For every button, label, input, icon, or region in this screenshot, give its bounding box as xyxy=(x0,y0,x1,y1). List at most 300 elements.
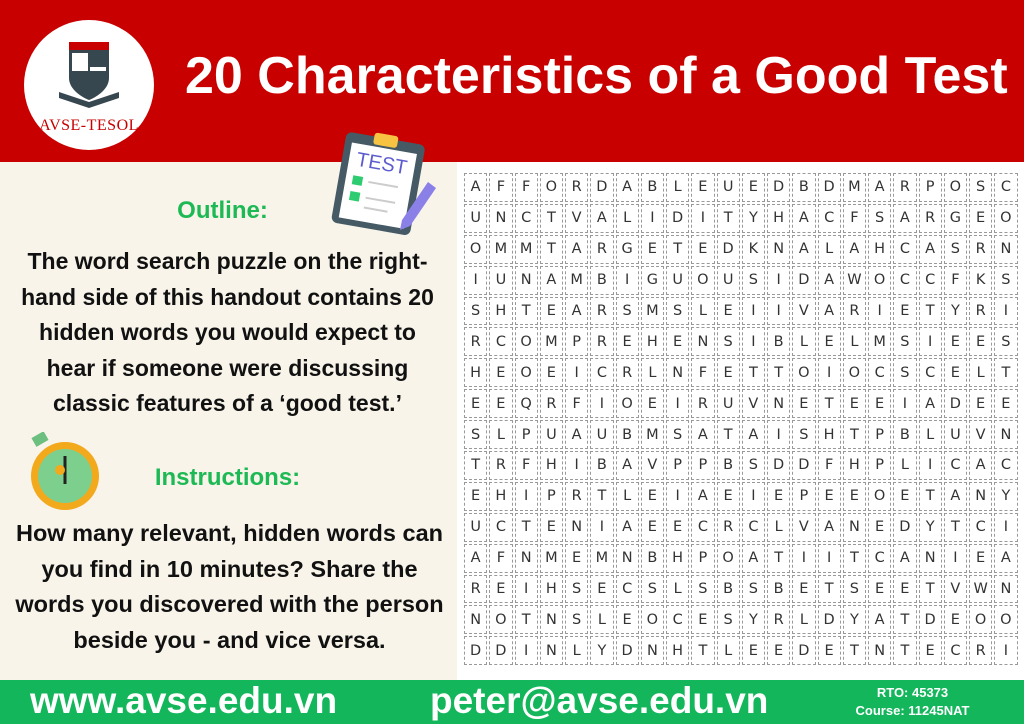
word search grid: F xyxy=(850,210,859,226)
word search grid: F xyxy=(497,550,505,566)
word search grid: W xyxy=(973,581,988,597)
word search grid: T xyxy=(926,303,935,319)
word search grid: B xyxy=(597,272,607,288)
word search grid: O xyxy=(697,272,709,288)
word search grid: E xyxy=(698,241,707,257)
word search grid: C xyxy=(875,550,885,566)
word search grid: V xyxy=(976,427,986,443)
word search grid: O xyxy=(647,612,658,628)
word search grid: M xyxy=(596,550,608,566)
word search grid: T xyxy=(900,612,909,628)
word search grid: P xyxy=(875,427,884,443)
word search grid: A xyxy=(622,457,632,473)
word search grid: A xyxy=(572,241,582,257)
word search grid: E xyxy=(496,365,505,381)
word search grid: S xyxy=(724,334,733,350)
word search grid: E xyxy=(774,643,783,659)
word search grid: E xyxy=(698,179,707,195)
word search grid: U xyxy=(723,179,733,195)
word search grid: E xyxy=(799,581,808,597)
word search grid: E xyxy=(976,210,985,226)
word search grid: R xyxy=(723,519,733,535)
word search grid: S xyxy=(1001,272,1010,288)
word search grid: E xyxy=(875,396,884,412)
word search grid: I xyxy=(877,303,882,319)
word search grid: N xyxy=(495,210,506,226)
word search grid: I xyxy=(751,303,756,319)
word search grid: D xyxy=(596,179,607,195)
word search grid: V xyxy=(572,210,582,226)
word search grid: D xyxy=(773,457,784,473)
word search grid: A xyxy=(976,457,986,473)
word search grid: E xyxy=(648,519,657,535)
word search grid: T xyxy=(774,365,783,381)
word search grid: C xyxy=(673,612,683,628)
word search grid: T xyxy=(951,519,960,535)
word search grid: I xyxy=(1004,519,1008,535)
word search grid: U xyxy=(546,427,557,443)
word search grid: B xyxy=(774,581,784,597)
word search grid: I xyxy=(600,519,604,535)
word search grid: A xyxy=(546,272,556,288)
word search grid: G xyxy=(647,272,658,288)
word search grid: A xyxy=(698,488,708,504)
word search grid: B xyxy=(774,334,784,350)
word search grid: I xyxy=(827,550,831,566)
word search grid: L xyxy=(497,427,505,443)
word search grid: T xyxy=(749,365,758,381)
word search grid: A xyxy=(471,550,481,566)
word search grid: V xyxy=(647,457,657,473)
word search grid: D xyxy=(798,643,809,659)
word search grid: C xyxy=(824,210,834,226)
word search grid: C xyxy=(496,334,506,350)
word search grid: D xyxy=(622,643,633,659)
word search grid: N xyxy=(521,272,532,288)
word search grid: T xyxy=(522,303,531,319)
word search grid: S xyxy=(749,272,758,288)
icon: test clipboard xyxy=(332,132,436,235)
word search grid: E xyxy=(976,550,985,566)
word search grid: R xyxy=(900,179,910,195)
word search grid: L xyxy=(598,612,606,628)
word search grid: I xyxy=(650,210,655,226)
word search grid: A xyxy=(597,210,607,226)
word search grid: O xyxy=(798,365,810,381)
word search grid: M xyxy=(873,334,886,350)
word search grid: S xyxy=(471,303,480,319)
word search grid: C xyxy=(925,272,935,288)
word search grid: S xyxy=(951,241,960,257)
word search grid: A xyxy=(471,179,481,195)
left panel xyxy=(0,162,457,680)
word search grid: S xyxy=(749,457,758,473)
word search grid: L xyxy=(977,365,985,381)
word search grid: U xyxy=(470,210,481,226)
word search grid: T xyxy=(597,488,606,504)
word search grid: I xyxy=(701,210,705,226)
word search grid: V xyxy=(799,303,809,319)
word search grid: R xyxy=(546,396,556,412)
word search grid: E xyxy=(623,612,632,628)
word search grid: E xyxy=(850,396,859,412)
word search grid: N xyxy=(1000,581,1011,597)
email: peter@avse.edu.vn xyxy=(430,680,768,721)
instructions text: beside you - and vice versa. xyxy=(73,626,386,652)
word search grid: L xyxy=(699,303,707,319)
word search grid: O xyxy=(849,365,860,381)
word search grid: N xyxy=(1000,427,1011,443)
word search grid: U xyxy=(723,272,733,288)
word search grid: E xyxy=(471,396,480,412)
word search grid: E xyxy=(951,365,960,381)
word search grid: R xyxy=(774,612,784,628)
icon: test clipboard: TEST xyxy=(355,149,409,179)
word search grid: E xyxy=(496,581,505,597)
word search grid: I xyxy=(524,643,528,659)
word search grid: H xyxy=(874,241,885,257)
word search grid: E xyxy=(900,581,909,597)
word search grid: H xyxy=(849,457,860,473)
word search grid: I xyxy=(574,457,579,473)
word search grid: E xyxy=(774,488,783,504)
word search grid: M xyxy=(570,272,583,288)
word search grid: I xyxy=(928,457,932,473)
word search grid: K xyxy=(976,272,985,288)
word search grid: E xyxy=(597,581,606,597)
word search grid: N xyxy=(672,365,683,381)
word search grid: M xyxy=(545,550,558,566)
word search grid: B xyxy=(723,581,733,597)
word search grid: C xyxy=(1001,179,1011,195)
word search grid: C xyxy=(698,519,708,535)
word search grid: E xyxy=(673,334,682,350)
word search grid: O xyxy=(520,365,532,381)
word search grid xyxy=(464,173,1018,665)
word search grid: A xyxy=(748,550,758,566)
word search grid: C xyxy=(597,365,607,381)
word search grid: T xyxy=(673,241,682,257)
word search grid: A xyxy=(925,396,935,412)
word search grid: V xyxy=(748,396,758,412)
word search grid: C xyxy=(925,365,935,381)
word search grid: A xyxy=(875,612,885,628)
word search grid: D xyxy=(798,272,809,288)
word search grid: I xyxy=(751,334,756,350)
word search grid: O xyxy=(520,334,532,350)
word search grid: I xyxy=(1004,643,1008,659)
icon: stopwatch xyxy=(31,432,99,510)
word search grid: O xyxy=(495,612,507,628)
word search grid: Y xyxy=(850,612,859,628)
word search grid: N xyxy=(874,643,885,659)
word search grid: B xyxy=(799,179,809,195)
word search grid: B xyxy=(723,457,733,473)
word search grid: A xyxy=(622,179,632,195)
rto info: RTO: 45373 xyxy=(877,685,948,700)
word search grid: C xyxy=(622,581,632,597)
word search grid: N xyxy=(773,396,784,412)
word search grid: H xyxy=(672,643,683,659)
word search grid: E xyxy=(547,519,556,535)
word search grid: C xyxy=(875,365,885,381)
word search grid: I xyxy=(953,550,958,566)
word search grid: E xyxy=(1001,396,1010,412)
word search grid: D xyxy=(672,210,683,226)
word search grid: R xyxy=(597,241,607,257)
word search grid: I xyxy=(827,365,831,381)
outline text: classic features of a ‘good test.’ xyxy=(53,390,402,416)
word search grid: Y xyxy=(951,303,960,319)
word search grid: I xyxy=(751,488,756,504)
word search grid: U xyxy=(496,272,506,288)
word search grid: A xyxy=(1001,550,1011,566)
instructions text: How many relevant, hidden words can xyxy=(16,520,443,546)
word search grid: L xyxy=(775,519,783,535)
title: 20 Characteristics of a Good Test xyxy=(185,47,1008,105)
word search grid: M xyxy=(545,334,558,350)
word search grid: E xyxy=(547,365,556,381)
outline text: hidden words you would expect to xyxy=(39,319,416,345)
word search grid: S xyxy=(976,179,985,195)
word search grid: M xyxy=(646,427,659,443)
outline text: hear if someone were discussing xyxy=(47,354,408,380)
word search grid: L xyxy=(724,643,732,659)
word search grid: O xyxy=(621,396,633,412)
word search grid: E xyxy=(825,334,834,350)
word search grid: S xyxy=(1001,334,1010,350)
word search grid: F xyxy=(951,272,960,288)
word search grid: O xyxy=(470,241,481,257)
outline text xyxy=(21,248,434,416)
word search grid: R xyxy=(698,396,708,412)
word search grid: N xyxy=(571,519,582,535)
word search grid: A xyxy=(900,550,910,566)
word search grid: S xyxy=(572,612,581,628)
word search grid: S xyxy=(875,210,884,226)
website: www.avse.edu.vn xyxy=(30,680,337,721)
word search grid: Y xyxy=(1001,488,1010,504)
word search grid: C xyxy=(900,272,910,288)
word search grid: H xyxy=(546,581,557,597)
footer xyxy=(0,680,1024,724)
word search grid: D xyxy=(899,519,910,535)
heading: instructions: Instructions: xyxy=(155,464,300,491)
word search grid: F xyxy=(699,365,707,381)
word search grid: A xyxy=(698,427,708,443)
word search grid: R xyxy=(597,303,607,319)
word search grid: I xyxy=(802,550,806,566)
word search grid: Y xyxy=(926,519,935,535)
word search grid: L xyxy=(573,643,581,659)
word search grid: A xyxy=(824,272,834,288)
word search grid: A xyxy=(875,179,885,195)
word search grid: R xyxy=(471,581,481,597)
word search grid: U xyxy=(470,519,481,535)
word search grid: T xyxy=(900,643,909,659)
word search grid: T xyxy=(774,550,783,566)
word search grid: L xyxy=(623,210,631,226)
instructions text: words you discovered with the person xyxy=(15,591,444,617)
word search grid: T xyxy=(926,581,935,597)
word search grid: E xyxy=(724,365,733,381)
word search grid: U xyxy=(950,427,961,443)
word search grid: A xyxy=(622,519,632,535)
word search grid: T xyxy=(724,427,733,443)
word search grid: A xyxy=(572,427,582,443)
word search grid: N xyxy=(697,334,708,350)
word search grid: E xyxy=(547,303,556,319)
word search grid: C xyxy=(950,643,960,659)
word search grid: H xyxy=(470,365,481,381)
word search grid: N xyxy=(470,612,481,628)
word search grid: R xyxy=(496,457,506,473)
word search grid: T xyxy=(850,643,859,659)
word search grid: O xyxy=(975,612,986,628)
word search grid: E xyxy=(698,612,707,628)
word search grid: A xyxy=(572,303,582,319)
word search grid: O xyxy=(1000,612,1012,628)
word search grid: H xyxy=(495,303,506,319)
word search grid: T xyxy=(825,581,834,597)
word search grid: N xyxy=(1000,241,1011,257)
word search grid: S xyxy=(648,581,657,597)
word search grid: R xyxy=(572,179,582,195)
rto info: Course: 11245NAT xyxy=(856,703,969,718)
word search grid: B xyxy=(647,550,657,566)
word search grid: S xyxy=(471,427,480,443)
word search grid: A xyxy=(925,241,935,257)
word search grid: R xyxy=(572,488,582,504)
word search grid: A xyxy=(950,488,960,504)
word search grid: T xyxy=(471,457,480,473)
word search grid: B xyxy=(647,179,657,195)
word search grid: I xyxy=(776,303,781,319)
word search grid: N xyxy=(849,519,860,535)
word search grid: S xyxy=(673,303,682,319)
word search grid: S xyxy=(623,303,632,319)
word search grid: D xyxy=(723,241,734,257)
word search grid: C xyxy=(521,210,531,226)
word search grid: P xyxy=(800,488,808,504)
word search grid: E xyxy=(471,488,480,504)
logo: AVSE-TESOL xyxy=(39,117,139,134)
word search grid: C xyxy=(900,241,910,257)
word search grid: R xyxy=(976,643,986,659)
word search grid: Q xyxy=(520,396,532,412)
word search grid: A xyxy=(824,303,834,319)
word search grid: N xyxy=(925,550,936,566)
word search grid: R xyxy=(976,241,986,257)
word search grid: H xyxy=(647,334,658,350)
word search grid: E xyxy=(976,334,985,350)
word search grid: T xyxy=(825,396,834,412)
word search grid: C xyxy=(748,519,758,535)
word search grid: I xyxy=(524,488,528,504)
word search grid: S xyxy=(673,427,682,443)
word search grid: I xyxy=(675,396,680,412)
word search grid: R xyxy=(849,303,859,319)
word search grid: E xyxy=(572,550,581,566)
word search grid: T xyxy=(547,241,556,257)
word search grid: I xyxy=(524,581,528,597)
word search grid: N xyxy=(546,612,557,628)
word search grid: E xyxy=(623,334,632,350)
word search grid: E xyxy=(875,581,884,597)
word search grid: L xyxy=(850,334,858,350)
word search grid: O xyxy=(1000,210,1012,226)
word search grid: N xyxy=(521,550,532,566)
word search grid: E xyxy=(749,643,758,659)
word search grid: E xyxy=(875,519,884,535)
word search grid: F xyxy=(497,179,505,195)
word search grid: D xyxy=(773,179,784,195)
word search grid: T xyxy=(850,550,859,566)
word search grid: S xyxy=(724,612,733,628)
word search grid: I xyxy=(1004,303,1008,319)
word search grid: H xyxy=(824,427,835,443)
word search grid: E xyxy=(724,303,733,319)
word search grid: H xyxy=(495,488,506,504)
word search grid: R xyxy=(597,334,607,350)
word search grid: A xyxy=(799,210,809,226)
word search grid: V xyxy=(950,581,960,597)
word search grid: L xyxy=(674,179,682,195)
word search grid: L xyxy=(623,488,631,504)
word search grid: O xyxy=(874,272,885,288)
heading: outline: Outline: xyxy=(177,197,268,224)
word search grid: S xyxy=(900,334,909,350)
word search grid: I xyxy=(600,396,604,412)
word search grid: Y xyxy=(597,643,606,659)
outline text: The word search puzzle on the right- xyxy=(28,248,427,274)
word search grid: L xyxy=(926,427,934,443)
word search grid: B xyxy=(622,427,632,443)
word search grid: P xyxy=(572,334,581,350)
word search grid: P xyxy=(698,550,707,566)
word search grid: E xyxy=(673,519,682,535)
word search grid: F xyxy=(825,457,833,473)
word search grid: I xyxy=(625,272,629,288)
word search grid: L xyxy=(901,457,909,473)
word search grid: I xyxy=(776,272,781,288)
word search grid: Y xyxy=(749,612,758,628)
word search grid: U xyxy=(597,427,607,443)
word search grid: I xyxy=(574,365,579,381)
word search grid: H xyxy=(546,457,557,473)
word search grid: G xyxy=(950,210,961,226)
word search grid: A xyxy=(748,427,758,443)
word search grid: P xyxy=(926,179,934,195)
word search grid: T xyxy=(850,427,859,443)
instructions text xyxy=(15,520,444,653)
word search grid: S xyxy=(850,581,859,597)
word search grid: E xyxy=(648,396,657,412)
word search grid: E xyxy=(976,396,985,412)
word search panel xyxy=(457,162,1024,680)
outline text: hand side of this handout contains 20 xyxy=(21,284,434,310)
word search grid: C xyxy=(496,519,506,535)
word search grid: C xyxy=(1001,457,1011,473)
word search grid: L xyxy=(800,612,808,628)
word search grid: E xyxy=(951,612,960,628)
word search grid: D xyxy=(824,612,835,628)
word search grid: E xyxy=(825,643,834,659)
word search grid: A xyxy=(849,241,859,257)
word search grid: D xyxy=(495,643,506,659)
word search grid: D xyxy=(798,457,809,473)
word search grid: F xyxy=(522,179,530,195)
